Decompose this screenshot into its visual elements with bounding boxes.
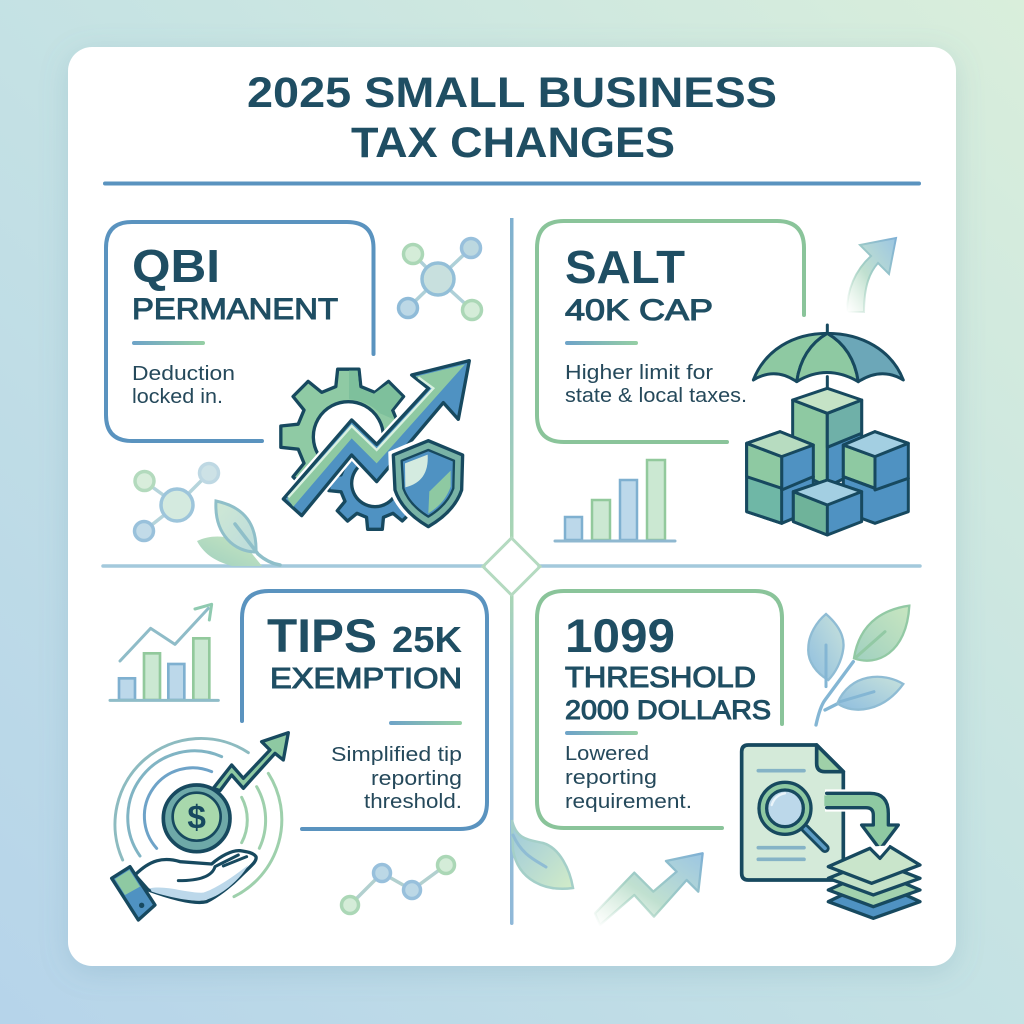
document — [742, 745, 843, 880]
heading: tips 25K: TIPS — [267, 609, 377, 662]
body text: locked in. — [132, 385, 223, 408]
body text — [331, 743, 462, 813]
icon: bar chart with trend line — [110, 604, 218, 700]
accent line — [565, 341, 638, 345]
card background — [68, 47, 956, 966]
body text — [565, 742, 692, 813]
title — [247, 69, 777, 167]
body text — [565, 361, 747, 407]
shield — [391, 437, 465, 530]
body text: state & local taxes. — [565, 384, 747, 407]
body text: reporting — [565, 766, 657, 789]
icon: leaf bottom centre — [512, 820, 573, 889]
heading: SALT: SALT — [565, 241, 685, 293]
icon: leaves right — [808, 606, 909, 725]
body text: reporting — [371, 767, 462, 790]
large green gear — [279, 368, 406, 480]
subheading: permanent: PERMANENT — [132, 293, 338, 326]
subheading: exemption: EXEMPTION — [270, 663, 462, 695]
heading: 1099: 1099 — [565, 609, 675, 662]
panel frame — [537, 591, 782, 828]
subheading: threshold amount — [565, 662, 771, 725]
icon: network nodes upper — [398, 238, 482, 320]
rising arrow — [213, 733, 288, 791]
icon: umbrella over cubes — [747, 325, 908, 535]
umbrella — [753, 325, 903, 388]
panel: QBI — [106, 222, 374, 441]
icon: faded arrow upper right — [847, 238, 896, 312]
body text: Lowered — [565, 742, 649, 765]
body text: Simplified tip — [331, 743, 462, 766]
icon: leaf lower left — [197, 501, 280, 566]
icon: gears, arrow and shield — [281, 361, 469, 530]
arrow — [825, 789, 903, 854]
accent line — [565, 731, 638, 735]
title: 2025 SMALL BUSINESS — [247, 69, 777, 117]
dollar sign: $ — [187, 799, 206, 836]
trend arrow — [283, 361, 469, 516]
icon: bar chart SALT — [555, 460, 675, 541]
cuff — [112, 867, 155, 920]
body text: threshold. — [364, 790, 462, 813]
title: TAX CHANGES — [351, 119, 675, 167]
body text: Deduction — [132, 362, 235, 385]
subheading: 40K cap: 40K CAP — [565, 294, 713, 327]
heading: tips 25K — [267, 609, 462, 662]
subheading: threshold amount: 2000 DOLLARS — [565, 695, 771, 725]
magnifier — [805, 828, 825, 848]
body text: requirement. — [565, 790, 692, 813]
accent line — [389, 721, 462, 725]
cube stack — [747, 388, 908, 535]
icon: faded arrow bottom — [595, 853, 703, 925]
panel frame — [537, 221, 804, 442]
icon: network nodes bottom — [342, 856, 454, 914]
panel: SALT — [537, 221, 804, 442]
panel frame — [106, 222, 374, 441]
signal arcs — [115, 738, 282, 897]
heading: QBI: QBI — [132, 240, 220, 292]
document lines — [758, 771, 804, 859]
subheading: threshold amount: THRESHOLD — [565, 662, 756, 694]
icon: network nodes lower — [134, 464, 218, 540]
panel: 1099 — [537, 591, 782, 828]
accent line — [132, 341, 205, 345]
icon: hand holding coin — [112, 733, 288, 920]
quadrant dividers — [103, 218, 920, 925]
panel frame — [242, 591, 487, 829]
icon: document, magnifier and stack — [742, 745, 920, 918]
body text — [132, 362, 235, 408]
heading: tips 25K: 25K — [392, 619, 462, 660]
paper stack — [828, 847, 920, 918]
coin — [163, 785, 230, 852]
hand — [135, 851, 256, 902]
small blue gear — [327, 461, 408, 531]
body text: Higher limit for — [565, 361, 713, 384]
title rule — [103, 182, 921, 186]
panel: Tips — [242, 591, 487, 829]
